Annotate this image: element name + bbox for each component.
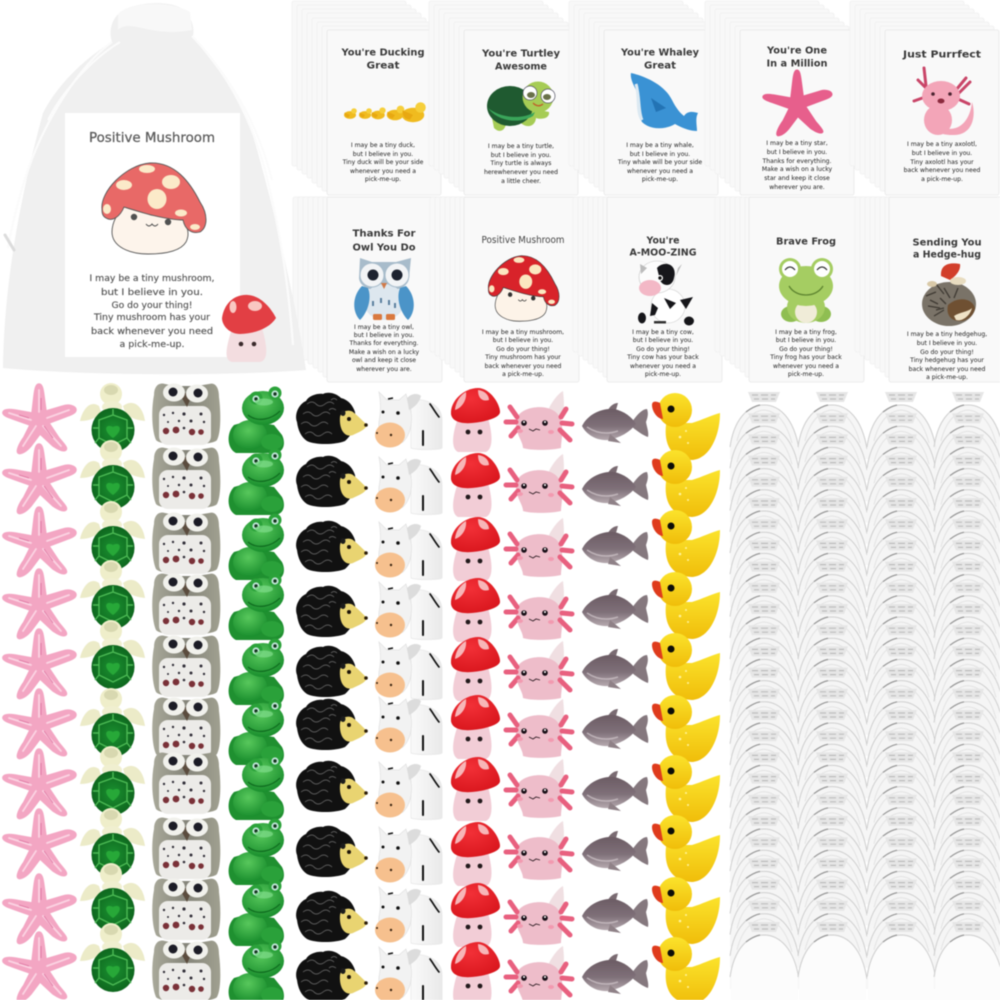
card: You're One In a Million: Thanks for everything.: [762, 158, 832, 165]
card: You're A-MOO-ZING: Go do your thing!: [636, 346, 690, 353]
card: You're Whaley Great: but I believe in you.: [630, 151, 690, 158]
card: Positive Mushroom: [482, 235, 564, 378]
card: You're Ducking Great: I may be a tiny duck,: [351, 142, 415, 149]
card: You're A-MOO-ZING: I may be a tiny cow,: [632, 329, 694, 336]
card: You're Ducking Great: Great: [366, 60, 400, 72]
card: Thanks For Owl You Do: Thanks for everything.: [349, 340, 419, 347]
bag body: [3, 3, 306, 374]
card: You're A-MOO-ZING: Tiny cow has your back: [626, 354, 699, 361]
card: You're Turtley Awesome: [481, 48, 561, 185]
card: You're Whaley Great: Tiny whale will be your side: [617, 159, 702, 166]
card: You're Turtley Awesome: Tiny turtle is always: [490, 160, 551, 167]
card: Just Purrfect: Just Purrfect: [902, 50, 982, 60]
card: Positive Mushroom: I may be a tiny mushroom,: [482, 329, 564, 336]
card: Thanks For Owl You Do: but I believe in you.: [354, 332, 414, 339]
card: You're Whaley Great: Great: [644, 60, 676, 72]
card: You're One In a Million: star and keep it close: [764, 175, 830, 182]
mushroom card: Go do your thing!: [112, 301, 192, 311]
card: Positive Mushroom: but I believe in you.: [493, 337, 553, 344]
card: You're A-MOO-ZING: but I believe in you.: [633, 337, 693, 344]
card: You're Ducking Great: You're Ducking: [340, 48, 424, 58]
card: Thanks For Owl You Do: [349, 228, 420, 373]
card: You're One In a Million: In a Million: [766, 58, 828, 70]
card: You're One In a Million: wherever you are.: [769, 184, 825, 191]
card: You're Turtley Awesome: herewhenever you need: [484, 169, 558, 176]
card: Thanks For Owl You Do: owl and keep it close: [352, 357, 416, 364]
mushroom card: a pick-me-up.: [120, 340, 184, 350]
card: You're Ducking Great: whenever you need a: [350, 168, 416, 175]
mushroom card: back whenever you need: [91, 327, 213, 337]
mushroom card: but I believe in you.: [101, 288, 203, 298]
column: cow figurines: [375, 392, 442, 1000]
column: turtle figurines: [80, 383, 145, 992]
card: Brave Frog: [769, 236, 842, 378]
card: Brave Frog: whenever you need a: [773, 363, 839, 370]
card: You're One In a Million: You're One: [766, 46, 827, 56]
card: Sending You a Hedge-hug: a Hedge-hug: [913, 250, 981, 260]
card: Sending You a Hedge-hug: Sending You: [912, 238, 982, 248]
card: Just Purrfect: Tiny axolotl has your: [909, 159, 974, 166]
card: Just Purrfect: back whenever you need: [904, 167, 981, 174]
card: Sending You a Hedge-hug: back whenever you need: [909, 366, 986, 373]
card: Brave Frog: Tiny frog has your back: [769, 354, 842, 361]
card: You're A-MOO-ZING: [626, 236, 699, 378]
column: duck figurines: [652, 393, 720, 1000]
card: You're A-MOO-ZING: You're: [646, 236, 680, 246]
card: Brave Frog: Brave Frog: [776, 236, 836, 248]
card: Just Purrfect: but I believe in you.: [912, 150, 972, 157]
card: Positive Mushroom: Positive Mushroom: [482, 235, 564, 246]
card: Thanks For Owl You Do: I may be a tiny owl,: [354, 324, 414, 331]
column: frog figurines: [229, 386, 284, 1000]
card: You're Ducking Great: pick-me-up.: [365, 176, 401, 183]
card: You're Whaley Great: You're Whaley: [620, 48, 700, 58]
card: You're Ducking Great: [340, 48, 426, 183]
card: Thanks For Owl You Do: Make a wish on a lucky: [349, 349, 420, 356]
column: axolotl figurines: [506, 391, 572, 1000]
bag gather folds: [118, 4, 192, 32]
card: Positive Mushroom: Tiny mushroom has your: [484, 354, 561, 361]
card: You're Whaley Great: [617, 48, 702, 183]
mushroom card: [65, 113, 240, 357]
card: Sending You a Hedge-hug: [907, 238, 987, 381]
card: Just Purrfect: I may be a tiny axolotl,: [907, 141, 977, 148]
column: hedgehog figurines: [296, 393, 368, 1000]
card: You're One In a Million: Make a wish on a lucky: [762, 166, 833, 173]
card: You're One In a Million: [762, 46, 833, 191]
mushroom card: Positive Mushroom: [89, 131, 215, 146]
card: Brave Frog: but I believe in you.: [776, 337, 836, 344]
card: You're Whaley Great: whenever you need a: [627, 168, 693, 175]
card: Positive Mushroom: a pick-me-up.: [502, 371, 544, 378]
column 4: organza bags: [934, 392, 1000, 1000]
card: You're Turtley Awesome: I may be a tiny turtle,: [488, 143, 554, 150]
card: Sending You a Hedge-hug: Tiny hedgehug has your: [909, 357, 984, 364]
card: Sending You a Hedge-hug: a pick-me-up.: [926, 374, 968, 381]
card: You're Ducking Great: but I believe in you.: [353, 151, 413, 158]
card: You're One In a Million: I may be a tiny star,: [766, 140, 828, 147]
column: owl figurines: [152, 383, 220, 1000]
mushroom card: Tiny mushroom has your: [93, 313, 210, 323]
card: Thanks For Owl You Do: Owl You Do: [352, 242, 416, 254]
mushroom card: I may be a tiny mushroom,: [90, 274, 214, 284]
card row: bottom: [293, 197, 1000, 382]
card: You're A-MOO-ZING: pick-me-up.: [645, 371, 681, 378]
card: Brave Frog: pick-me-up.: [788, 371, 824, 378]
column: starfish figurines: [3, 384, 76, 1000]
card: You're Turtley Awesome: but I believe in you.: [491, 152, 551, 159]
card: Sending You a Hedge-hug: Go do your thing!: [920, 349, 974, 356]
column 3: organza bags: [867, 392, 936, 1000]
small mushroom figurine: [222, 295, 276, 362]
card: You're Whaley Great: I may be a tiny whale,: [626, 142, 694, 149]
card: Sending You a Hedge-hug: but I believe in you.: [917, 340, 977, 347]
card: You're Ducking Great: Tiny duck will be your side: [342, 159, 424, 166]
card row: top: [292, 1, 999, 195]
card: Just Purrfect: [902, 50, 982, 183]
card: Just Purrfect: a pick-me-up.: [921, 176, 963, 183]
card: You're Turtley Awesome: Awesome: [495, 62, 547, 72]
card: Sending You a Hedge-hug: I may be a tiny hedgehug,: [907, 331, 987, 338]
card: You're A-MOO-ZING: whenever you need a: [630, 363, 696, 370]
card: You're Turtley Awesome: a little cheer.: [501, 178, 541, 185]
card: Positive Mushroom: back whenever you need: [485, 363, 562, 370]
card: You're One In a Million: but I believe in you.: [767, 149, 827, 156]
card: Thanks For Owl You Do: Thanks For: [352, 228, 416, 240]
column 1: organza bags: [730, 392, 799, 1000]
drawstrings: [5, 36, 293, 345]
card: You're Turtley Awesome: You're Turtley: [481, 48, 561, 60]
column: whale figurines: [582, 403, 648, 994]
column 2: organza bags: [798, 392, 867, 1000]
column: mushroom figurines: [451, 388, 500, 1000]
card: Positive Mushroom: Go do your thing!: [496, 346, 550, 353]
organza bag with mushroom card: [3, 3, 306, 374]
card: Brave Frog: Go do your thing!: [779, 346, 833, 353]
card: You're Whaley Great: pick-me-up.: [642, 176, 678, 183]
card: Brave Frog: I may be a tiny frog,: [775, 329, 837, 336]
card: You're A-MOO-ZING: A-MOO-ZING: [630, 248, 697, 258]
card: Thanks For Owl You Do: wherever you are.: [356, 366, 412, 373]
